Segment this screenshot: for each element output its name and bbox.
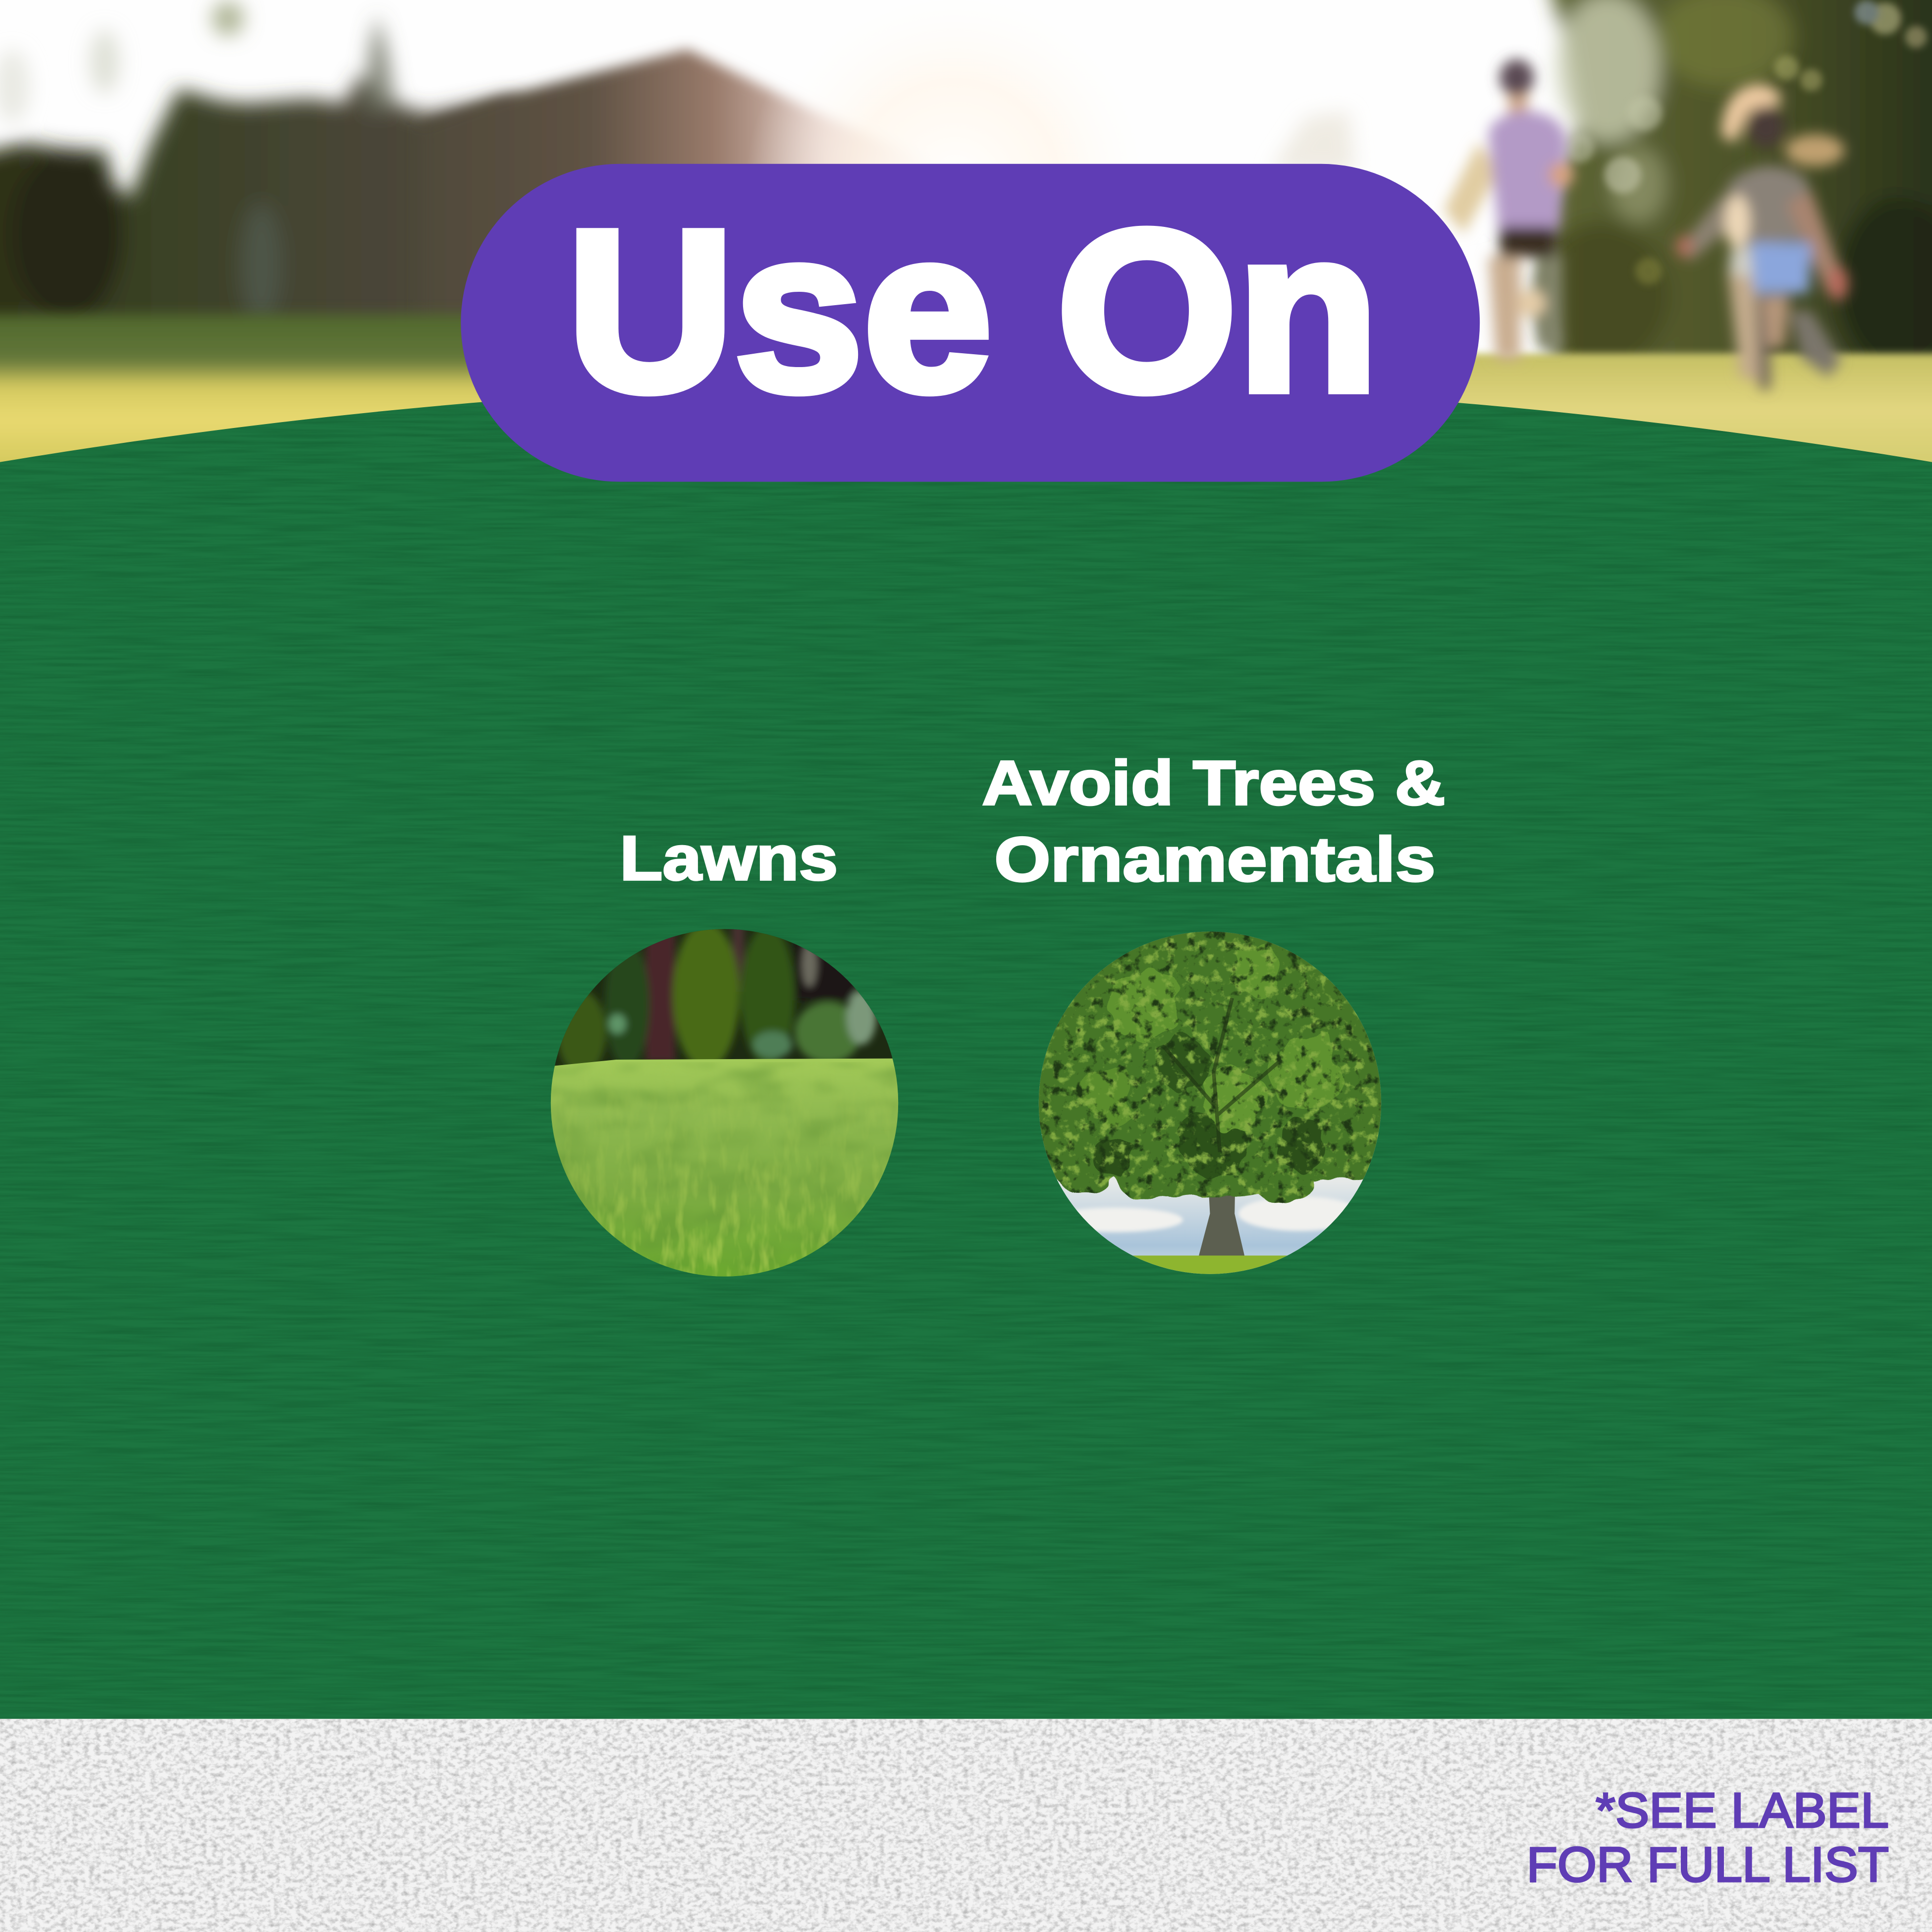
sun glow	[746, 0, 1164, 394]
label: Avoid Trees & Ornamentals: Ornamentals	[994, 824, 1436, 894]
child right	[1676, 84, 1848, 389]
canopy	[1013, 921, 1407, 1203]
title text: Use On	[567, 183, 1379, 439]
right haze	[1269, 111, 1355, 172]
left tree line	[0, 1, 518, 370]
footnote text	[1527, 1783, 1889, 1892]
ground	[1035, 1256, 1386, 1280]
bokeh highlights	[1565, 0, 1927, 285]
photo circle: lawn	[542, 918, 912, 1282]
photo circle: tree	[1038, 931, 1381, 1274]
title pill	[461, 164, 1480, 482]
house	[419, 49, 986, 357]
footnote text: *SEE LABEL	[1596, 1783, 1889, 1838]
lawn left in background	[0, 314, 986, 505]
right tree mass	[1534, 0, 1932, 370]
child left	[1444, 59, 1573, 360]
footnote text: FOR FULL LIST	[1527, 1837, 1889, 1892]
trunk	[1199, 1146, 1244, 1256]
label: Avoid Trees & Ornamentals: Avoid Trees &	[982, 748, 1446, 818]
lawn right in background	[1393, 354, 1932, 495]
label: Lawns: Lawns	[620, 823, 838, 893]
green textured dome panel	[0, 382, 1932, 1720]
label: Avoid Trees & Ornamentals	[982, 748, 1446, 894]
white textured footer band	[0, 1719, 1932, 1932]
background photo: family lawn with house and children	[0, 0, 1932, 505]
branches	[1164, 998, 1282, 1152]
